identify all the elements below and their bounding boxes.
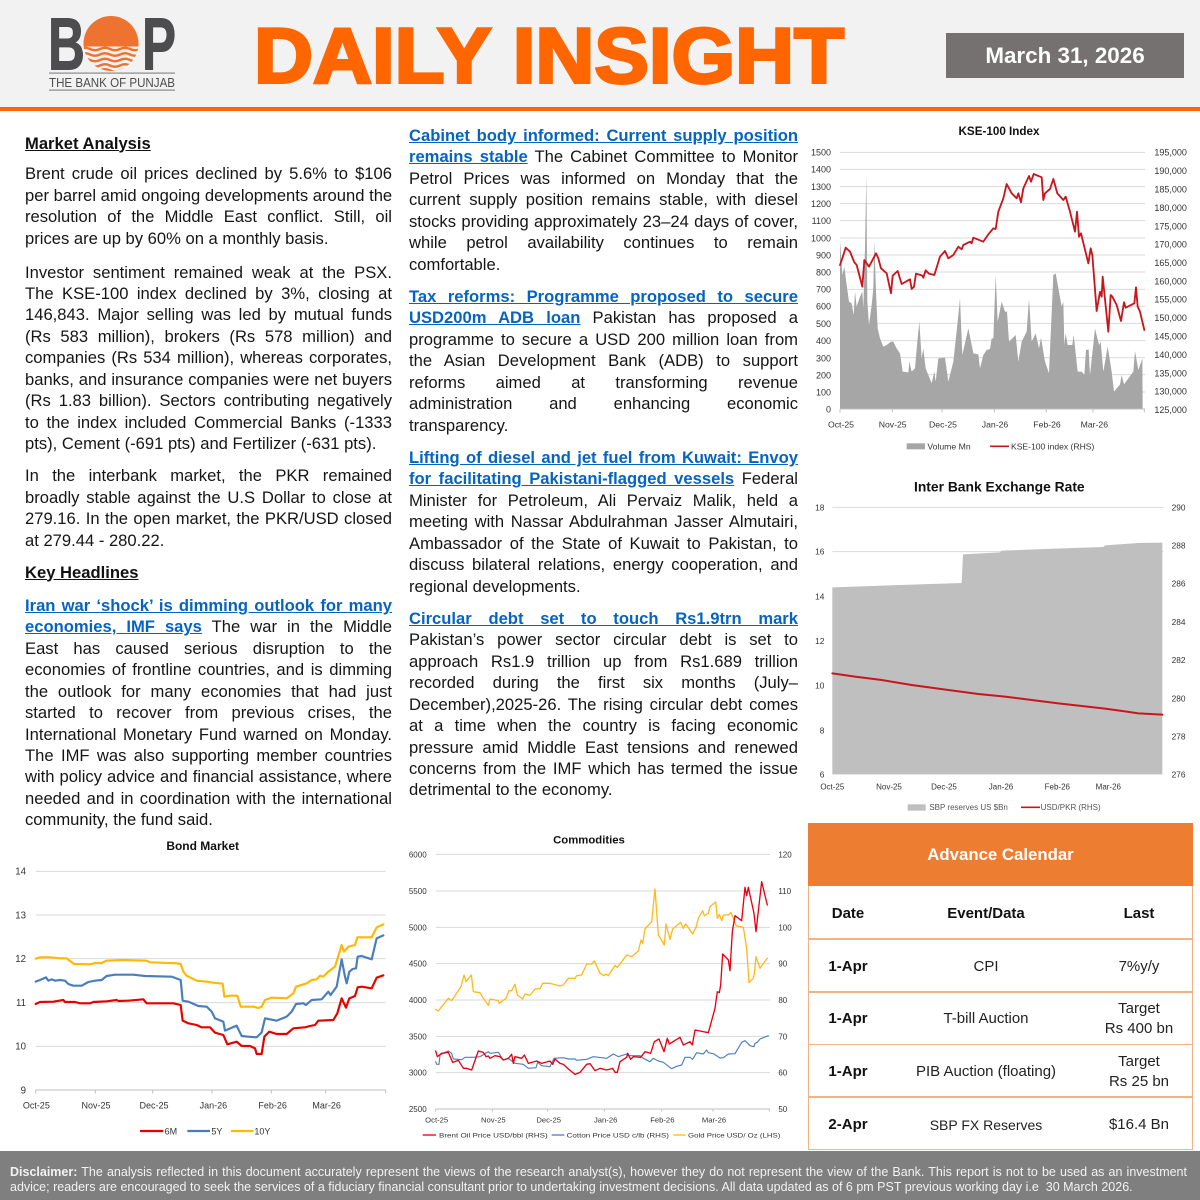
headline: Cabinet body: Petrol Prices was informed on Monday that the [409, 169, 798, 188]
chart: KSE-100 Index: 135,000 [1154, 368, 1187, 378]
headline: Tax reforms: administration and enhancing economic [409, 394, 798, 413]
chart: KSE-100 Index: 700 [816, 285, 831, 295]
text: PSX paragraph: to the index included Commercial Banks (-1333 [25, 413, 392, 432]
chart: Bond Market: 10Y [254, 1126, 270, 1136]
chart: KSE-100 Index: 600 [816, 302, 831, 312]
chart: Commodities: 4500 [409, 960, 427, 969]
text: oil paragraph: prices are up by 60% on a monthly basis. [25, 229, 328, 248]
headline: Iran war: with policy advice and financial assistance, where [25, 767, 392, 786]
chart: KSE-100 Index: 165,000 [1154, 258, 1187, 268]
chart: Bond Market [0, 830, 400, 1150]
heading: Key Headlines: Key Headlines [25, 562, 138, 582]
column header: date: Date [832, 905, 864, 922]
chart: Commodities: 4000 [409, 996, 427, 1005]
chart: Bond Market: 14 [15, 867, 27, 878]
chart: KSE-100 Index: 0 [826, 405, 831, 415]
chart: Inter Bank Exchange Rate: 288 [1172, 541, 1186, 551]
headline: Lifting of diesel: Minister for Petroleum, Ali Pervaiz Malik, held a [409, 491, 798, 510]
chart: Inter Bank Exchange Rate: SBP reserves US $Bn [929, 803, 1008, 812]
column header: event: Event/Data [947, 905, 1025, 922]
chart: Commodities: 120 [778, 850, 792, 859]
headline: Circular debt: at a time when the country is facing economic [409, 716, 798, 735]
chart: Commodities: Nov-25 [481, 1116, 506, 1125]
chart: KSE-100 Index: 1100 [812, 216, 831, 226]
headline: Cabinet body: Cabinet body informed: Current supply position [409, 126, 798, 145]
headline: Tax reforms: reforms aimed at transforming revenue [409, 373, 798, 392]
chart: Bond Market: Bond Market [166, 839, 239, 853]
disclaimer text: Disclaimer: The analysis reflected in this document accurately represent the views of the research analyst(s), however they do not represent the view of the Bank. This report is not to be used as an investment [10, 1164, 1187, 1178]
chart: Inter Bank Exchange Rate: 290 [1172, 502, 1186, 512]
chart: Bond Market: 13 [15, 910, 26, 921]
headline: Lifting of diesel: regional developments. [409, 577, 581, 596]
chart: KSE-100 Index: 800 [816, 267, 831, 277]
row: CPI event: CPI [973, 958, 999, 975]
headline: Circular debt: December),2025-26. The rising circular debt comes [409, 695, 798, 714]
chart: Bond Market: 5Y [211, 1126, 222, 1136]
text: PSX paragraph: 146,843. Major selling was led by mutual funds [25, 305, 392, 324]
row: PIB date: 1-Apr [828, 1063, 868, 1080]
text: oil paragraph: resolution of the Middle East conflict. Still, oil [25, 207, 392, 226]
text: PSX paragraph: pts), Cement (-691 pts) and Fertilizer (-631 pts). [25, 434, 376, 453]
chart: Bond Market: 10 [15, 1042, 26, 1053]
chart: KSE-100 Index: KSE-100 Index [959, 125, 1040, 138]
text: PSX paragraph: (Rs 1.83 billion). Sectors contributing negatively [25, 391, 392, 410]
row: T-bill event: T-bill Auction [943, 1010, 1029, 1027]
chart: Inter Bank Exchange Rate [815, 479, 1186, 812]
chart: Commodities: 5500 [409, 887, 427, 896]
row: PIB last [1109, 1053, 1169, 1090]
chart: Bond Market: Nov-25 [81, 1101, 111, 1111]
date box [946, 33, 1184, 78]
chart: Inter Bank Exchange Rate: 276 [1172, 770, 1186, 780]
chart: Inter Bank Exchange Rate: 278 [1172, 732, 1186, 742]
headline: Iran war: Iran war ‘shock’ is dimming outlook for many [25, 596, 392, 615]
chart: Commodities: Cotton Price USD c/lb (RHS) [567, 1132, 669, 1139]
text: PSX paragraph: (Rs 583 million), brokers (Rs 578 million) and [25, 327, 392, 346]
headline: Lifting of diesel: Ambassador of the State of Kuwait to Pakistan, to [409, 534, 798, 553]
chart: Bond Market: Oct-25 [23, 1101, 50, 1111]
chart: Inter Bank Exchange Rate: 10 [815, 681, 825, 691]
chart: Bond Market: 12 [15, 954, 26, 965]
chart: Commodities [400, 825, 800, 1150]
row: PIB last: Rs 25 bn [1109, 1073, 1169, 1090]
headline: Iran war: economies, IMF says The war in the Middle [25, 617, 392, 636]
chart: Bond Market: Feb-26 [258, 1101, 287, 1111]
chart: Bond Market: Mar-26 [312, 1101, 341, 1111]
calendar frame [808, 886, 1193, 1150]
headline: Iran war: the outlook for many economies that had just [25, 682, 392, 701]
chart: Bond Market: 11 [16, 998, 26, 1009]
chart: KSE-100 Index: 155,000 [1154, 295, 1187, 305]
chart: KSE-100 Index: Nov-25 [879, 419, 907, 429]
chart: KSE-100 Index: 100 [816, 387, 831, 397]
disclaimer footer [0, 1151, 1200, 1200]
headline: Lifting of diesel: meeting with Nassar Abdulrahman Jasser Almutairi, [409, 512, 798, 531]
chart: KSE-100 Index: 145,000 [1154, 332, 1187, 342]
row: T-bill last: Target [1118, 1000, 1160, 1017]
headline: Cabinet body: while petrol availability continues to remain [409, 233, 798, 252]
date box: March 31, 2026 [985, 43, 1145, 68]
headline: Tax reforms: Tax reforms: Programme proposed to secure [409, 287, 798, 306]
chart: Inter Bank Exchange Rate: USD/PKR (RHS) [1041, 803, 1101, 812]
chart: Inter Bank Exchange Rate: 282 [1172, 655, 1186, 665]
chart: Commodities: 3500 [409, 1032, 427, 1041]
headline: Cabinet body: current supply position remains stable, with diesel [409, 190, 798, 209]
text: PKR paragraph [25, 466, 392, 550]
chart: KSE-100 Index: 125,000 [1154, 405, 1187, 415]
chart: KSE-100 Index: 130,000 [1154, 387, 1187, 397]
chart: KSE-100 Index [811, 125, 1187, 452]
chart: Commodities: 50 [778, 1105, 788, 1114]
chart: Commodities: Dec-25 [536, 1116, 561, 1125]
chart: Bond Market: Jan-26 [200, 1101, 227, 1111]
calendar heading: Advance Calendar [927, 845, 1074, 864]
chart: KSE-100 Index: 200 [816, 370, 831, 380]
chart: KSE-100 Index: 170,000 [1154, 240, 1187, 250]
chart: KSE-100 Index: 175,000 [1154, 221, 1187, 231]
row: reserves date: 2-Apr [828, 1116, 868, 1133]
text: PSX paragraph [25, 262, 392, 453]
chart: Commodities: 60 [778, 1069, 788, 1078]
headline: Cabinet body [409, 126, 798, 274]
row: T-bill last [1105, 1000, 1173, 1037]
chart: KSE-100 Index: Mar-26 [1081, 419, 1108, 429]
chart: Commodities: Gold Price USD/ Oz (LHS) [688, 1132, 780, 1139]
chart: KSE-100 Index: Jan-26 [982, 419, 1008, 429]
headline: Lifting of diesel: discuss bilateral relations, energy cooperation, and [409, 555, 798, 574]
chart: KSE-100 Index: 400 [816, 336, 831, 346]
chart: KSE-100 Index: 300 [816, 353, 831, 363]
chart: Commodities: 70 [778, 1032, 788, 1041]
headline: Circular debt: Circular debt set to touch Rs1.9trn mark [409, 609, 798, 628]
chart: Bond Market: Dec-25 [139, 1101, 169, 1111]
text: PSX paragraph: The KSE-100 index declined by 3%, closing at [25, 284, 392, 303]
chart: Commodities: 6000 [409, 850, 427, 859]
text: oil paragraph: per barrel amid ongoing developments around the [25, 186, 392, 205]
headline: Cabinet body: remains stable The Cabinet Committee to Monitor [409, 147, 798, 166]
chart: Commodities: 3000 [409, 1069, 427, 1078]
row: reserves last: $16.4 Bn [1109, 1116, 1169, 1133]
headline: Lifting of diesel: Lifting of diesel and jet fuel from Kuwait: Envoy [409, 448, 798, 467]
chart: Bond Market: 6M [165, 1126, 177, 1136]
headline: Tax reforms [409, 287, 798, 435]
chart: Commodities: 80 [778, 996, 788, 1005]
headline: Iran war: needed and in coordination with the international [25, 789, 392, 808]
headline: Circular debt: approach Rs1.9 trillion up from Rs1.689 trillion [409, 652, 798, 671]
chart: Commodities: Brent Oil Price USD/bbl (RHS) [439, 1132, 548, 1139]
text: PSX paragraph: companies (Rs 534 million), whereas corporates, [25, 348, 392, 367]
chart: Inter Bank Exchange Rate: Nov-25 [876, 783, 902, 792]
chart: KSE-100 Index: Feb-26 [1033, 419, 1061, 429]
chart: Commodities: Mar-26 [702, 1116, 726, 1125]
chart: Inter Bank Exchange Rate: Oct-25 [820, 783, 845, 792]
text: PSX paragraph: Investor sentiment remained weak at the PSX. [25, 262, 392, 282]
disclaimer text [10, 1164, 1187, 1194]
row: PIB event: PIB Auction (floating) [916, 1063, 1056, 1080]
headline: Iran war: started to recover from previous crises, the [25, 703, 392, 722]
chart: Inter Bank Exchange Rate: 286 [1172, 579, 1186, 589]
chart: KSE-100 Index: 1400 [811, 165, 831, 175]
chart: KSE-100 Index: 900 [816, 250, 831, 260]
headline: Circular debt: Pakistan’s power sector circular debt is set to [409, 630, 798, 649]
disclaimer text: advice; readers are encouraged to seek the services of a fiduciary financial consultant prior to undertaking investment decisions. All data updated as of 6 pm PST previous working day i.e 30 March 2026. [10, 1180, 1133, 1194]
header band [0, 0, 1200, 107]
row: T-bill date: 1-Apr [828, 1010, 868, 1027]
chart: Inter Bank Exchange Rate: Feb-26 [1045, 783, 1071, 792]
headline: Cabinet body: stocks providing approximately 23–24 days of cover, [409, 212, 798, 231]
chart: Inter Bank Exchange Rate: Mar-26 [1096, 783, 1122, 792]
headline: Iran war: economies of frontline countries, and is dimming [25, 660, 392, 679]
chart: KSE-100 Index: 150,000 [1154, 313, 1187, 323]
chart: KSE-100 Index: KSE-100 index (RHS) [1011, 442, 1094, 452]
chart: Commodities: Oct-25 [425, 1116, 448, 1125]
calendar heading [808, 823, 1193, 886]
chart: Inter Bank Exchange Rate: 18 [815, 502, 825, 512]
row: CPI date: 1-Apr [828, 958, 868, 975]
chart: Commodities: 110 [778, 887, 792, 896]
chart: Inter Bank Exchange Rate: 14 [815, 591, 825, 601]
headline: Iran war: The IMF was also supporting member countries [25, 746, 392, 765]
chart: KSE-100 Index: 140,000 [1154, 350, 1187, 360]
headline: Circular debt: recorded during the first six months (July– [409, 673, 798, 692]
chart: KSE-100 Index: 160,000 [1154, 276, 1187, 286]
headline: Iran war: International Monetary Fund warned on Monday. [25, 725, 392, 744]
row: T-bill last: Rs 400 bn [1105, 1020, 1173, 1037]
row: PIB last: Target [1118, 1053, 1160, 1070]
chart: Inter Bank Exchange Rate: 6 [820, 769, 825, 779]
chart: KSE-100 Index: 180,000 [1154, 203, 1187, 213]
chart: Commodities: Commodities [553, 835, 625, 847]
chart: Inter Bank Exchange Rate: 8 [820, 725, 825, 735]
header orange rule [0, 107, 1200, 111]
chart: KSE-100 Index: Dec-25 [929, 419, 957, 429]
row: reserves event: SBP FX Reserves [930, 1117, 1042, 1133]
text: PKR paragraph: broadly stable against the U.S Dollar to close at [25, 488, 392, 507]
chart: KSE-100 Index: 1500 [811, 148, 831, 158]
headline: Tax reforms: USD200m ADB loan Pakistan has proposed a [409, 308, 798, 327]
chart: Commodities: Jan-26 [594, 1116, 617, 1125]
headline: Tax reforms: transparency. [409, 416, 508, 435]
chart: KSE-100 Index: Volume Mn [927, 442, 971, 452]
chart: Inter Bank Exchange Rate: Dec-25 [931, 783, 957, 792]
chart: KSE-100 Index: 500 [816, 319, 831, 329]
text: oil paragraph [25, 164, 392, 248]
headline: Iran war: community, the fund said. [25, 810, 213, 829]
chart: Commodities: 2500 [409, 1105, 427, 1114]
chart: Commodities: 90 [778, 960, 788, 969]
chart: Inter Bank Exchange Rate: 284 [1172, 617, 1186, 627]
chart: KSE-100 Index: 195,000 [1154, 148, 1187, 158]
chart: KSE-100 Index: 190,000 [1154, 166, 1187, 176]
chart: KSE-100 Index: 1300 [811, 182, 831, 192]
headline: Lifting of diesel [409, 448, 798, 596]
chart: Inter Bank Exchange Rate: Jan-26 [989, 783, 1014, 792]
chart: KSE-100 Index: Oct-25 [828, 419, 854, 429]
chart: Commodities: 100 [778, 923, 792, 932]
row: CPI last: 7%y/y [1119, 958, 1159, 975]
headline: Tax reforms: programme to secure a USD 200 million loan from [409, 330, 798, 349]
headline: Iran war: East has caused serious disruption to the [25, 639, 392, 658]
chart: Bond Market: 9 [21, 1085, 26, 1096]
chart: Inter Bank Exchange Rate: 12 [815, 636, 825, 646]
headline: Circular debt: detrimental to the economy. [409, 780, 613, 799]
text: oil paragraph: Brent crude oil prices declined by 5.6% to $106 [25, 164, 392, 183]
heading: Market Analysis: Market Analysis [25, 134, 151, 152]
headline: Tax reforms: the Asian Development Bank (ADB) to support [409, 351, 798, 370]
chart: Inter Bank Exchange Rate: 16 [815, 547, 825, 557]
headline: Circular debt: concerns from the IMF which has termed the issue [409, 759, 798, 778]
chart: KSE-100 Index: 1200 [811, 199, 831, 209]
headline: Iran war [25, 596, 392, 829]
text: PKR paragraph: In the interbank market, the PKR remained [25, 466, 392, 485]
headline: Cabinet body: comfortable. [409, 255, 500, 274]
logo: The Bank of Punjab [48, 8, 176, 91]
chart: Inter Bank Exchange Rate: Inter Bank Exchange Rate [914, 479, 1085, 495]
headline: Circular debt [409, 609, 798, 799]
column header: last: Last [1124, 905, 1154, 922]
chart: Inter Bank Exchange Rate: 280 [1172, 693, 1186, 703]
headline: Lifting of diesel: for facilitating Pakistani-flagged vessels Federal [409, 469, 798, 488]
text: PKR paragraph: 279.16. In the open market, the PKR/USD closed [25, 509, 392, 528]
chart: KSE-100 Index: 185,000 [1154, 184, 1187, 194]
chart: KSE-100 Index: 1000 [811, 233, 831, 243]
chart: Commodities: 5000 [409, 923, 427, 932]
text: PSX paragraph: banks, and insurance companies were net buyers [25, 370, 392, 389]
chart: Commodities: Feb-26 [650, 1116, 674, 1125]
headline: Circular debt: pressure amid Middle East tensions and renewed [409, 738, 798, 757]
text: PKR paragraph: at 279.44 - 280.22. [25, 531, 164, 550]
